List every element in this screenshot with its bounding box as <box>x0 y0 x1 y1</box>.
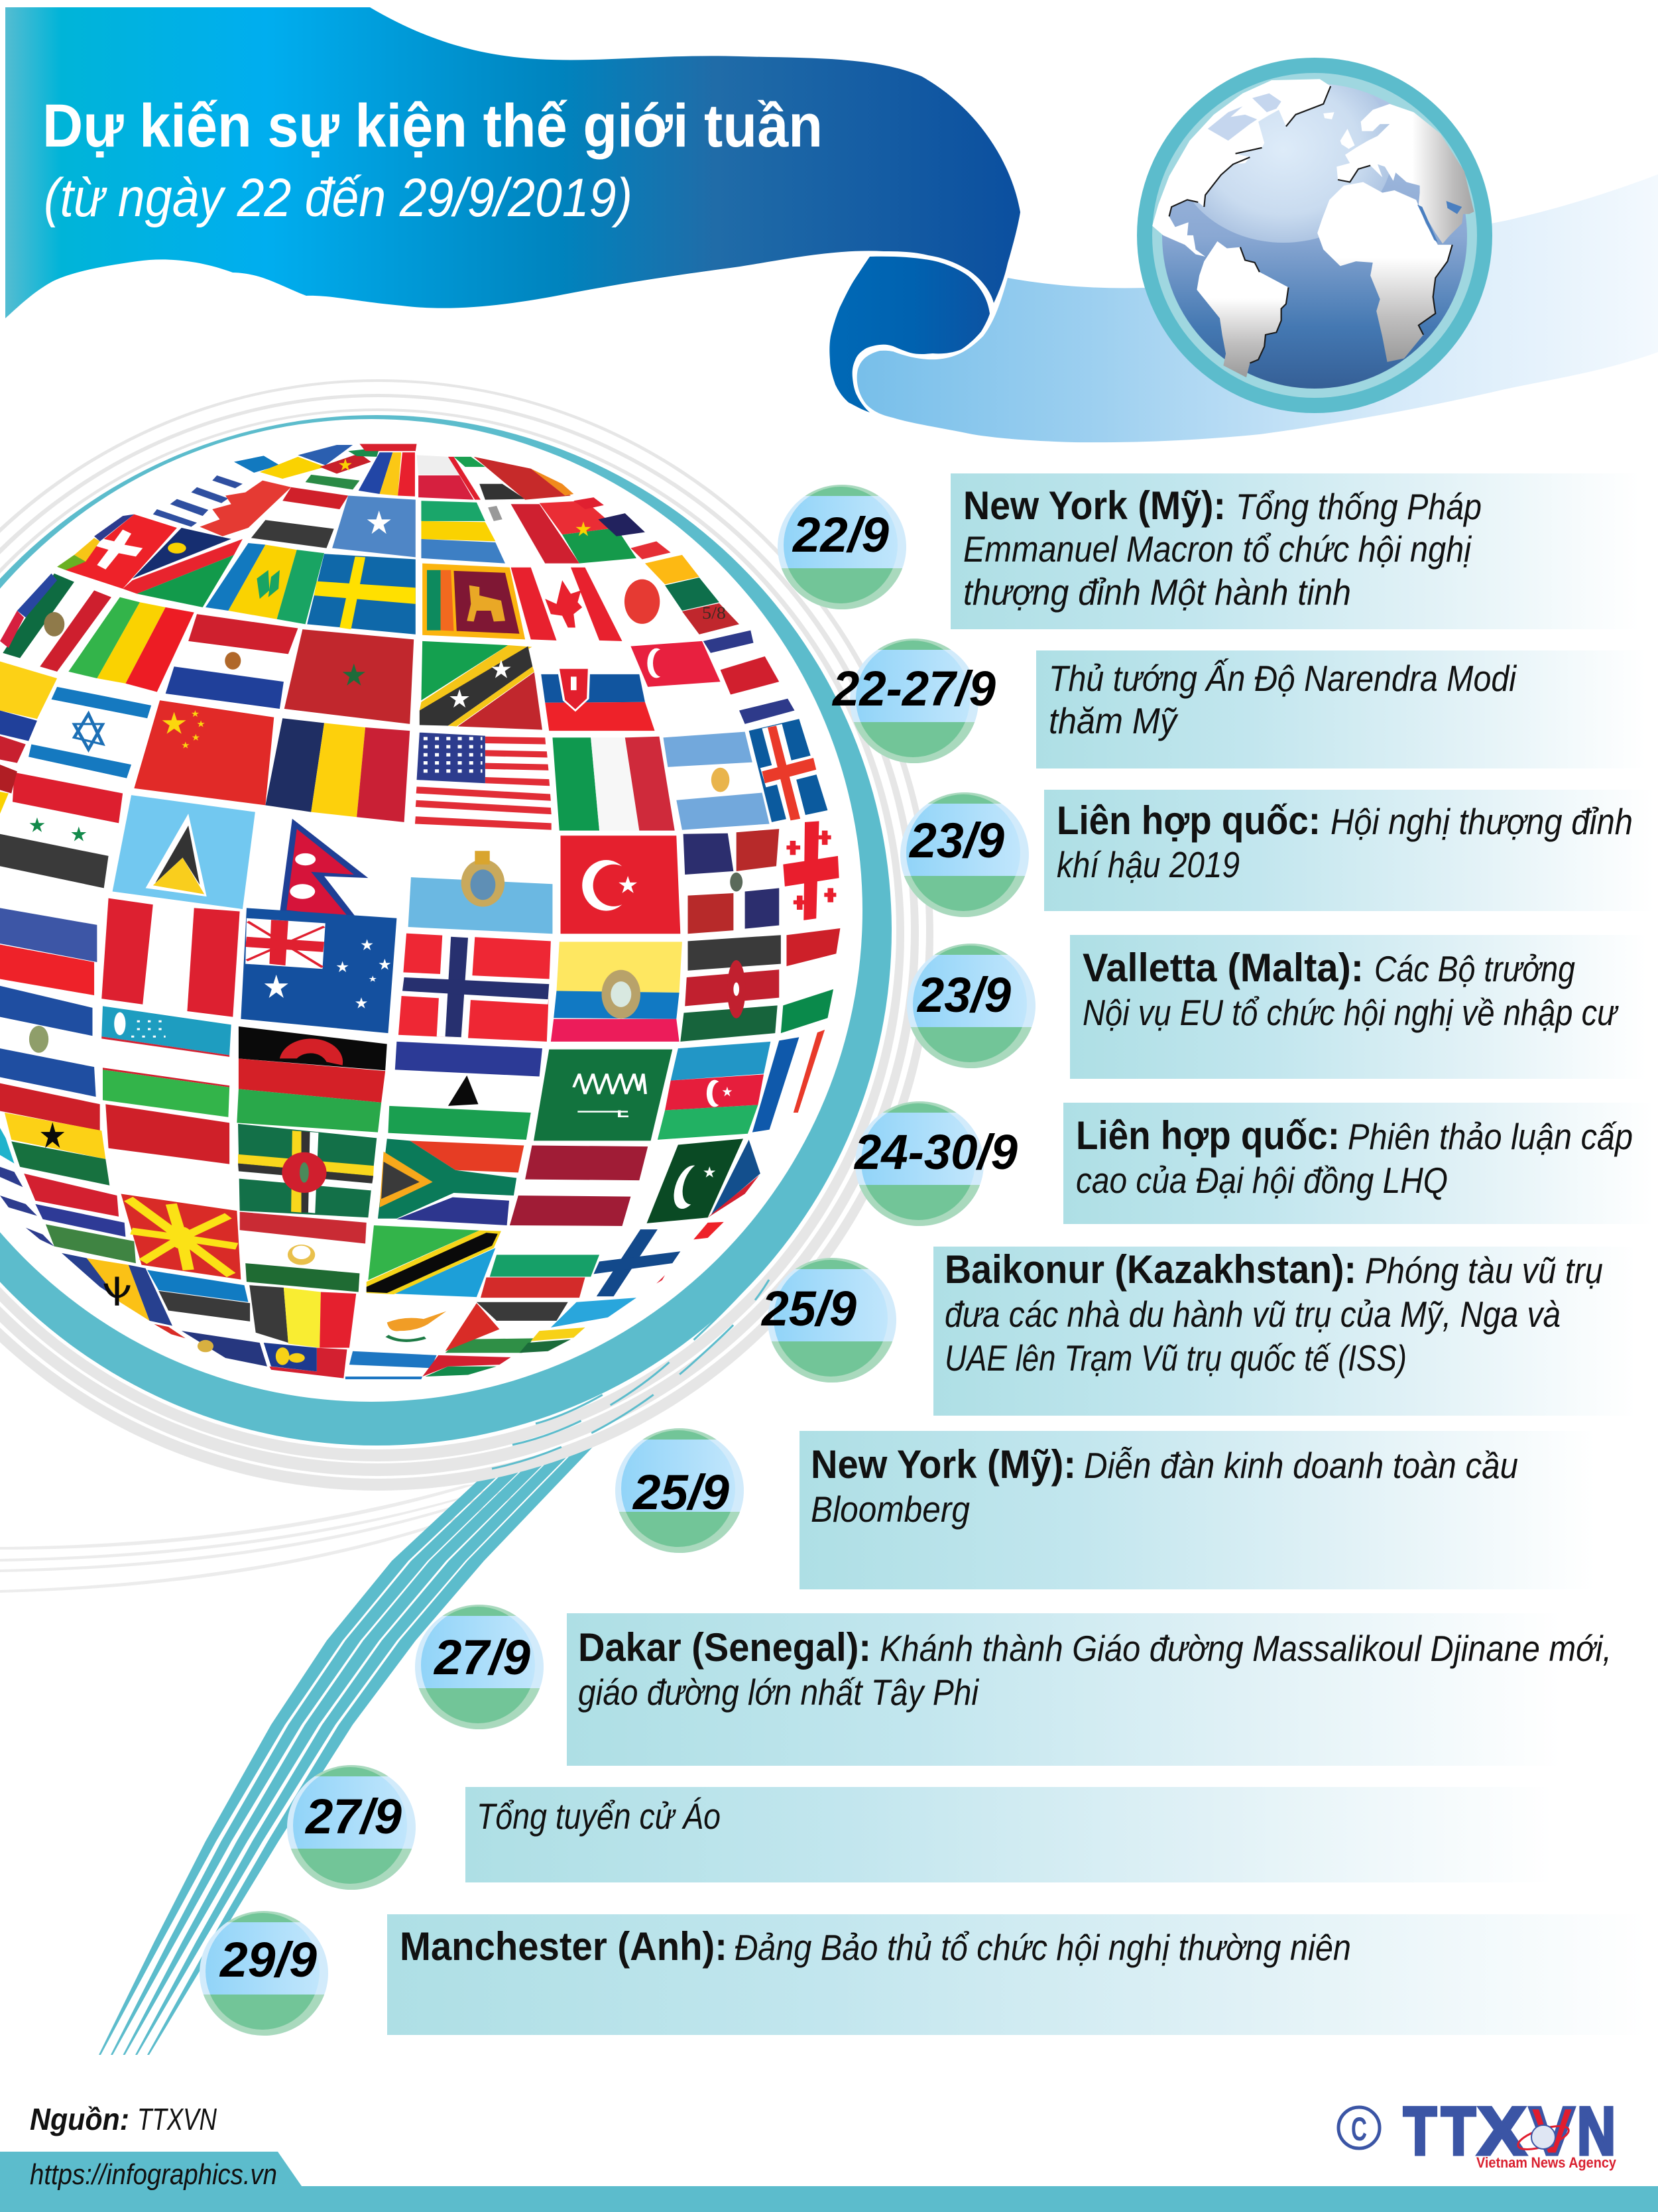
event 3 panel <box>908 790 1654 911</box>
event 4 panel: Valletta (Malta): <box>1083 946 1364 990</box>
event 8 panel: 27/9 <box>433 1630 530 1685</box>
logo: TTXVN: V <box>1529 2093 1574 2169</box>
event 1 panel <box>792 473 1640 629</box>
event 10 panel: Manchester (Anh): <box>400 1924 727 1969</box>
event 2 panel: thăm Mỹ <box>1049 700 1179 741</box>
event 7 panel: New York (Mỹ): <box>811 1442 1076 1487</box>
event 2 panel <box>831 650 1646 768</box>
title banner <box>5 7 1020 412</box>
logo: TTXVN: X <box>1478 2093 1526 2169</box>
flag globe <box>0 444 840 1379</box>
event 10 panel: Đảng Bảo thủ tổ chức hội nghị thường niên <box>735 1927 1351 1968</box>
event 8 panel: giáo đường lớn nhất Tây Phi <box>578 1672 980 1713</box>
event 5 panel: cao của Đại hội đồng LHQ <box>1076 1160 1448 1201</box>
logo: TTXVN: T <box>1441 2093 1476 2169</box>
website address: https://infographics.vn <box>30 2158 277 2191</box>
logo: TTXVN: C <box>1351 2111 1367 2148</box>
decorative globe rings and tail <box>0 379 933 2055</box>
event 10 panel: 29/9 <box>219 1932 317 1987</box>
event 8 panel: Dakar (Senegal): <box>578 1625 871 1670</box>
event 3 panel: Liên hợp quốc: <box>1057 798 1321 843</box>
icon: earth globe <box>1137 57 1492 413</box>
event 7 panel <box>632 1431 1595 1589</box>
event 1 panel: 22/9 <box>792 507 889 562</box>
banner body <box>5 7 1020 318</box>
event 6 panel: đưa các nhà du hành vũ trụ của Mỹ, Nga và <box>945 1294 1561 1335</box>
event 1 panel: New York (Mỹ): <box>963 483 1226 528</box>
title heading: Dự kiến sự kiện thế giới tuần <box>42 92 823 160</box>
event 1 panel: Emmanuel Macron tổ chức hội nghị <box>963 528 1472 570</box>
source credit <box>30 2102 217 2136</box>
event 6 panel: Phóng tàu vũ trụ <box>1365 1250 1603 1291</box>
small number on flag: 5/8 <box>702 603 726 623</box>
event 4 panel <box>916 935 1647 1079</box>
source credit: TTXVN <box>137 2102 217 2136</box>
event 7 panel: 25/9 <box>632 1465 729 1520</box>
event 4 panel: Các Bộ trưởng <box>1374 948 1575 989</box>
flags upper hemisphere <box>0 444 839 934</box>
date bubbles <box>200 484 1036 2036</box>
logo: TTXVN <box>1338 2093 1617 2171</box>
banner fold <box>829 257 990 412</box>
event 9 panel: 27/9 <box>304 1789 402 1844</box>
event 6 panel <box>760 1247 1636 1416</box>
light blue swoosh <box>857 174 1658 442</box>
event 1 panel: thượng đỉnh Một hành tinh <box>963 572 1351 613</box>
event 1 panel: Tổng thống Pháp <box>1236 486 1482 527</box>
event 4 panel: 23/9 <box>916 967 1011 1022</box>
event 9 panel <box>304 1787 1553 1882</box>
continents <box>1152 79 1474 377</box>
event 8 panel <box>433 1613 1612 1766</box>
event 6 panel: 25/9 <box>760 1281 857 1336</box>
event 9 panel: Tổng tuyển cử Áo <box>477 1796 721 1837</box>
footer band <box>0 2152 1658 2212</box>
event 6 panel: Baikonur (Kazakhstan): <box>945 1247 1356 1292</box>
source credit: Nguồn: <box>30 2102 129 2136</box>
title subheading: (từ ngày 22 đến 29/9/2019) <box>44 168 632 228</box>
event 5 panel: 24-30/9 <box>853 1125 1018 1180</box>
event 7 panel: Diễn đàn kinh doanh toàn cầu <box>1084 1445 1518 1486</box>
logo: TTXVN: Vietnam News Agency <box>1476 2154 1617 2171</box>
logo: TTXVN: N <box>1577 2093 1616 2169</box>
event 3 panel: khí hậu 2019 <box>1057 844 1240 885</box>
event 2 panel: 22-27/9 <box>831 661 996 716</box>
event 10 panel <box>219 1914 1647 2035</box>
event 3 panel: 23/9 <box>908 813 1004 868</box>
event 6 panel: UAE lên Trạm Vũ trụ quốc tế (ISS) <box>945 1337 1407 1379</box>
logo: TTXVN: T <box>1403 2093 1437 2169</box>
event 5 panel <box>853 1103 1653 1224</box>
flags lower hemisphere <box>0 898 840 1379</box>
event 7 panel: Bloomberg <box>811 1489 970 1530</box>
event 5 panel: Liên hợp quốc: <box>1076 1113 1340 1158</box>
event 2 panel: Thủ tướng Ấn Độ Narendra Modi <box>1049 658 1517 699</box>
